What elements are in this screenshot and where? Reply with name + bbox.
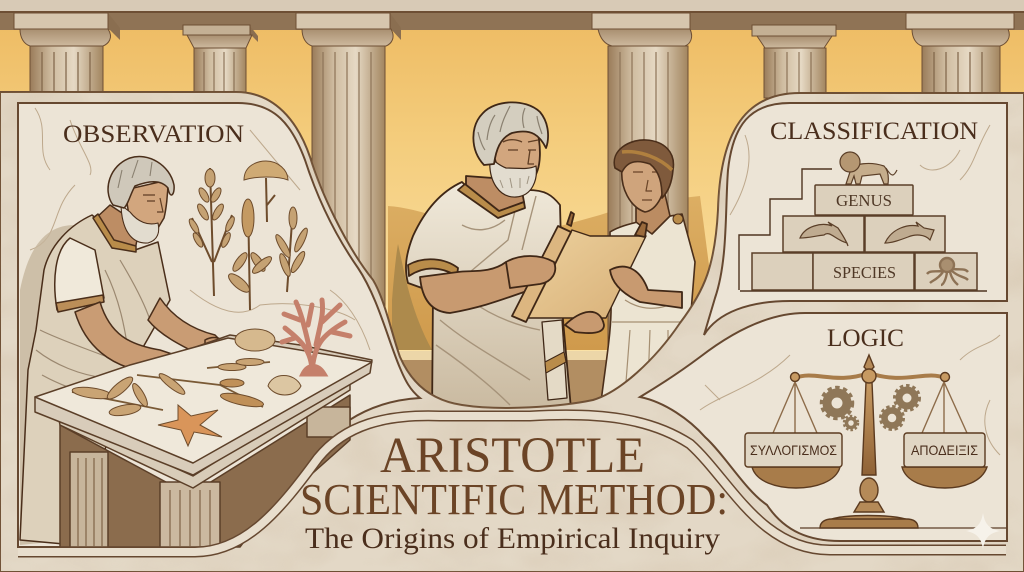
- icon: octopus: [927, 258, 968, 285]
- heading: classification: CLASSIFICATION: [770, 118, 978, 145]
- face: [486, 122, 540, 190]
- column second right: [752, 25, 836, 98]
- neck: [96, 205, 140, 250]
- block: genus: GENUS: [836, 191, 892, 210]
- robe: [406, 182, 572, 420]
- tunic sleeve: [55, 238, 104, 310]
- entablature: [0, 0, 1024, 30]
- scroll paper: [528, 230, 646, 318]
- low wall behind figures: [388, 351, 718, 360]
- panel: logic: [640, 313, 1007, 541]
- title line 1: ARISTOTLE: [380, 428, 645, 484]
- distant hills: [388, 196, 720, 350]
- scroll roller: [512, 226, 571, 322]
- block: species: SPECIES: [833, 263, 896, 282]
- neck: [466, 176, 524, 212]
- background: temple scene with sky and columns: [0, 0, 1024, 410]
- icon: gears: [822, 386, 920, 430]
- heading: logic: LOGIC: [827, 325, 904, 352]
- sleeve trim: [408, 259, 458, 276]
- aristotle centre figure: [406, 102, 682, 420]
- icon: sparkle: [966, 513, 1000, 549]
- panel: observation: [18, 103, 420, 547]
- shadow behind figure: [20, 225, 75, 545]
- tablets with labels: [745, 433, 842, 467]
- column far right: [906, 13, 1014, 96]
- table: [35, 335, 372, 547]
- face: [125, 180, 168, 235]
- tablets with labels: ΣΥΛΛΟΓΙΣΜΟΣ: [750, 442, 837, 458]
- title line 2: SCIENTIFIC METHOD:: [300, 475, 728, 524]
- specimen: coral: [282, 300, 350, 374]
- panel: classification: [704, 103, 1007, 335]
- specimens: shells, leaves and starfish: [71, 329, 301, 446]
- stair outline: [739, 169, 987, 291]
- hair: [473, 102, 548, 165]
- scale: ΑΠΟΔΕΙΞΙΣ: [911, 442, 978, 458]
- pans: [752, 467, 840, 488]
- cypress trees: [392, 244, 432, 350]
- specimens: herbs: [187, 161, 310, 310]
- tabletop: [35, 335, 372, 475]
- observer figure: [20, 157, 232, 545]
- hands on scroll: [506, 256, 555, 288]
- title band curve: [18, 415, 1006, 552]
- column second left: [183, 25, 258, 96]
- column centre left: [296, 13, 401, 356]
- subtitle: The Origins of Empirical Inquiry: [305, 522, 720, 555]
- icon: dolphins: [800, 222, 934, 246]
- post: [862, 382, 876, 475]
- beard: [121, 205, 159, 243]
- strings: [773, 382, 967, 433]
- heading: observation: OBSERVATION: [63, 121, 244, 148]
- scale: [745, 355, 987, 528]
- table columns: [70, 452, 108, 547]
- student figure: [600, 140, 695, 410]
- hair: [108, 157, 174, 208]
- marble veins: [30, 108, 370, 350]
- column far left: [14, 13, 120, 96]
- arm: [420, 258, 552, 313]
- stone pyramid: [752, 185, 977, 290]
- robe body: [20, 215, 170, 545]
- icon: lion: [840, 152, 897, 184]
- block: species: [813, 253, 914, 290]
- collar trim: [458, 184, 525, 218]
- title block: [300, 428, 728, 555]
- beam: [795, 373, 945, 378]
- block: genus: [815, 185, 913, 215]
- beard: [490, 158, 536, 197]
- arms: [75, 302, 205, 378]
- column centre right: [592, 13, 692, 356]
- sleeve band: [56, 295, 104, 312]
